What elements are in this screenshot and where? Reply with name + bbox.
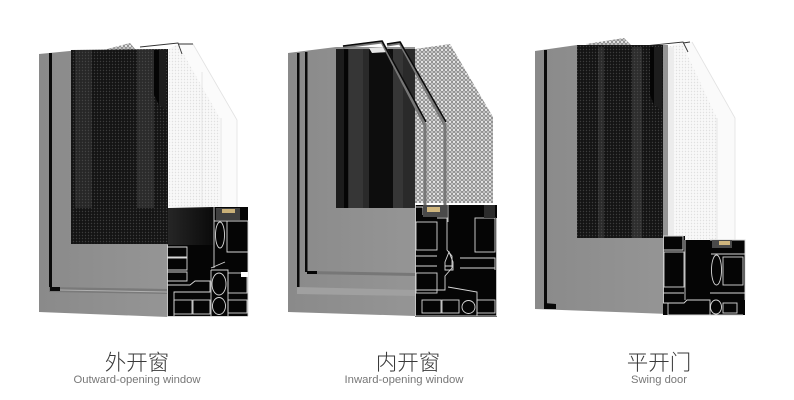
dark interior [336, 47, 415, 208]
perforated mesh [415, 44, 493, 203]
frame bottom groove [49, 287, 168, 294]
glass frame lines [343, 41, 446, 206]
caption: inward-opening window: 内开窗 [376, 351, 440, 375]
black frame stripe [49, 53, 52, 290]
dark mesh panel [71, 49, 168, 244]
caption: outward-opening window: 外开窗 [105, 351, 169, 375]
gasket [719, 241, 730, 245]
frame grooves [297, 271, 415, 296]
aluminium profile section [415, 205, 497, 317]
caption: outward-opening window [74, 351, 201, 386]
insect mesh top [586, 38, 632, 50]
insect mesh top [92, 43, 136, 55]
caption: inward-opening window: Inward-opening window [344, 374, 464, 386]
gasket [427, 207, 440, 212]
panel: swing door [535, 38, 745, 315]
aluminium profile section [663, 236, 745, 315]
caption: swing door: Swing door [631, 374, 687, 386]
glass panes [140, 43, 237, 207]
aluminium profile section [167, 207, 248, 317]
glass panes [634, 42, 735, 240]
panel: outward-opening window [39, 43, 248, 317]
frame [535, 45, 668, 314]
dark mesh panel [577, 45, 663, 238]
frame [288, 47, 415, 316]
frame [39, 50, 168, 317]
black frame stripe [544, 50, 547, 309]
caption: swing door [627, 351, 691, 386]
lower dark sill [168, 207, 214, 250]
frame black stripes [297, 52, 308, 288]
caption: inward-opening window [344, 351, 464, 386]
caption: outward-opening window: Outward-opening window [74, 374, 201, 386]
caption: swing door: 平开门 [627, 351, 691, 375]
panel: inward-opening window [288, 41, 497, 317]
gasket [222, 209, 235, 213]
frame bottom shadow [544, 303, 556, 309]
